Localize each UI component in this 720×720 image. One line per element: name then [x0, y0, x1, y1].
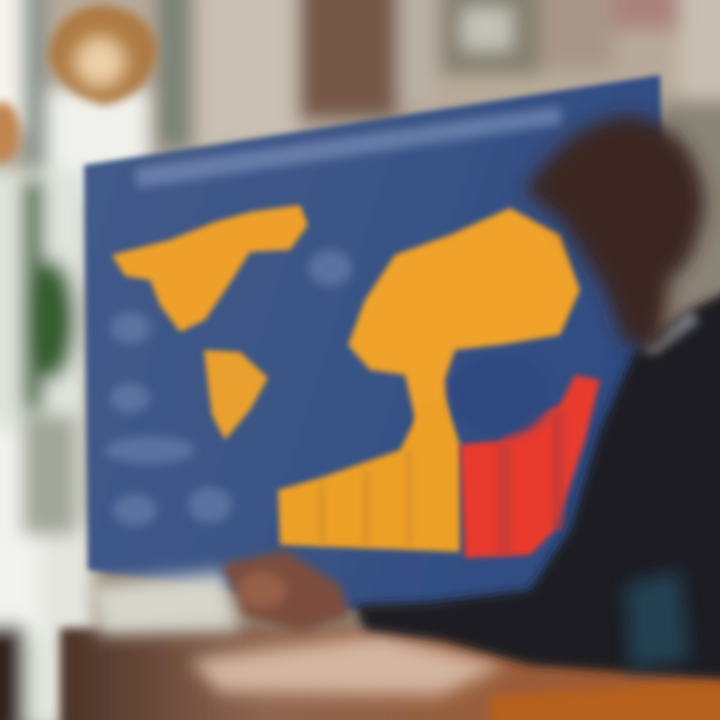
map: dark blue inner gap — [450, 353, 550, 437]
paper under the board — [90, 572, 240, 635]
map: eurasia and africa — [348, 208, 580, 445]
legend: blurred side stats — [105, 250, 352, 526]
person: head and hair — [525, 115, 705, 345]
bar chart: red bars — [460, 375, 600, 558]
person: hand — [222, 550, 350, 632]
left window and plant — [0, 170, 95, 720]
person: collar — [640, 308, 700, 355]
paper on the table — [190, 635, 505, 695]
person: body in dark jacket — [355, 285, 720, 680]
map: south america — [204, 350, 268, 440]
heading: blurred board title — [135, 106, 562, 188]
icon: hanging lamp — [0, 5, 158, 162]
panel: world map board — [84, 75, 664, 610]
person — [222, 115, 720, 680]
background: cafe interior — [0, 0, 720, 300]
table — [60, 628, 720, 720]
bar chart: orange bars — [278, 400, 460, 552]
map: north america — [112, 205, 308, 332]
